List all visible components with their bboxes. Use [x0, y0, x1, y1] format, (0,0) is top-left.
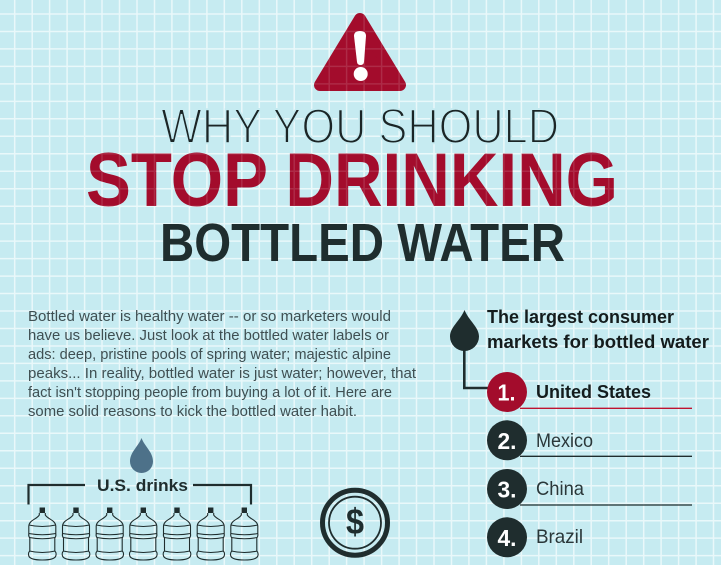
rank 2: Mexico	[487, 420, 692, 460]
rank 4: Brazil: 4.	[498, 525, 516, 551]
intro paragraph: peaks... In reality, bottled water is just water; however, that	[28, 366, 416, 382]
label: U.S. drinks: U.S. drinks	[97, 476, 188, 495]
rank 4: Brazil	[487, 517, 583, 557]
heading: markets for bottled water	[487, 332, 709, 352]
rank 2: Mexico: 2.	[498, 428, 516, 454]
rank 2: Mexico: Mexico	[536, 430, 593, 452]
bracket	[28, 485, 251, 504]
title: BOTTLED WATER	[160, 213, 565, 273]
rank 1: United States: 1.	[498, 380, 516, 406]
rank 3: China: 3.	[498, 476, 516, 502]
intro paragraph: have us believe. Just look at the bottled water labels or	[28, 328, 389, 344]
heading: The largest consumer	[487, 307, 674, 327]
row of seven water jugs	[28, 508, 258, 560]
rank 4: Brazil: Brazil	[536, 526, 583, 548]
intro paragraph: ads: deep, pristine pools of spring water; majestic alpine	[28, 347, 391, 363]
intro paragraph: Bottled water is healthy water -- or so marketers would	[28, 309, 391, 325]
rank 3: China: China	[536, 478, 584, 500]
title	[86, 100, 618, 273]
icon: warning triangle	[320, 19, 400, 85]
intro paragraph	[28, 309, 416, 420]
icon: dollar coin: $	[346, 501, 364, 542]
intro paragraph: some solid reasons to kick the bottled water habit.	[28, 404, 357, 420]
icon: blue water drop	[130, 438, 153, 473]
panel: U.S. drinks	[28, 438, 258, 560]
intro paragraph: fact isn't stopping people from buying a lot of it. Here are	[28, 385, 392, 401]
panel: largest consumer markets	[450, 307, 709, 557]
rank 1: United States	[487, 372, 692, 412]
grid sheen over red artwork	[84, 13, 620, 208]
rank 1: United States: United States	[536, 381, 651, 402]
icon: dark water drop with connector	[450, 310, 492, 388]
icon: dollar coin	[322, 490, 388, 555]
title: WHY YOU SHOULD	[161, 100, 559, 154]
heading	[487, 307, 709, 352]
rank 3: China	[487, 469, 692, 509]
title: STOP DRINKING	[86, 138, 618, 223]
